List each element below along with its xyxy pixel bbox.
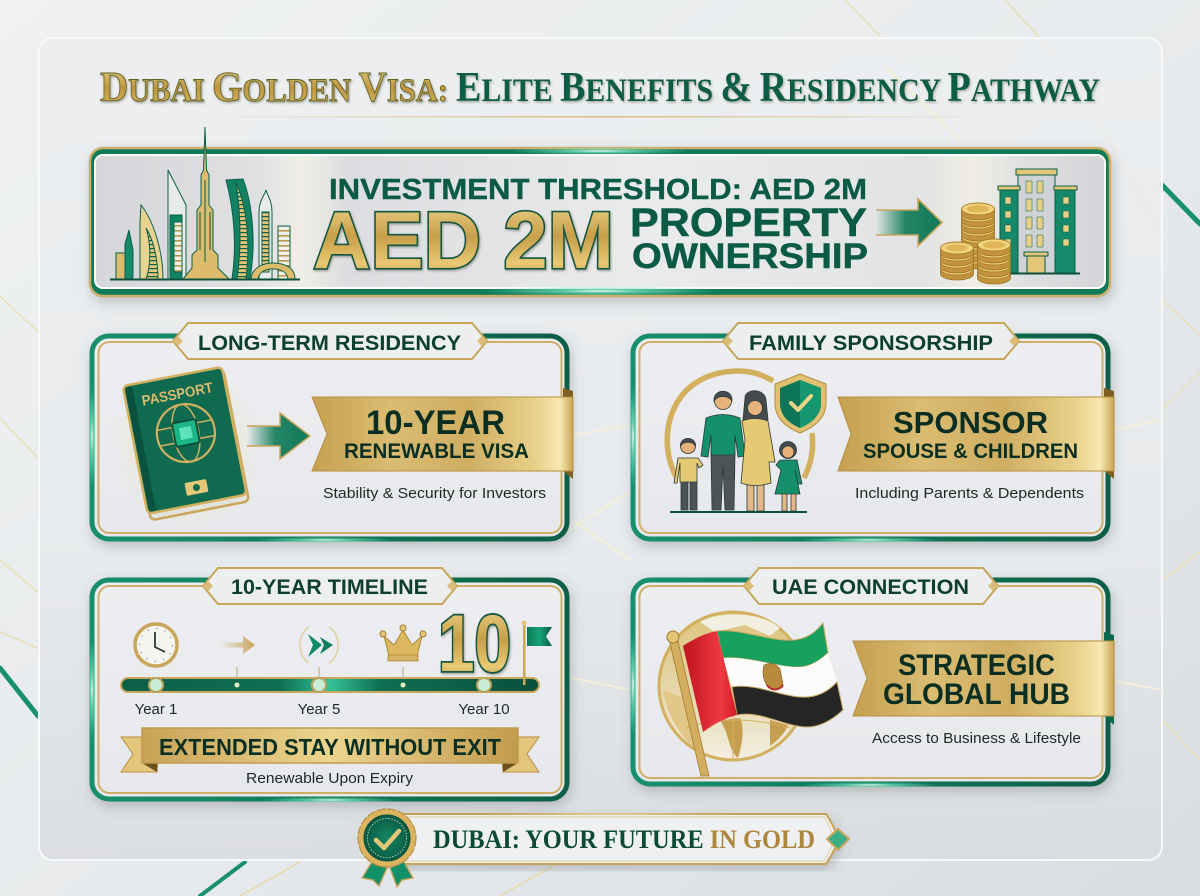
icon: passport: PASSPORT (141, 380, 214, 410)
icon: gold coins (940, 203, 1010, 284)
title: DUBAI GOLDEN VISA: (100, 65, 448, 111)
footer text: DUBAI: YOUR FUTURE IN GOLD (433, 825, 815, 854)
ribbon: GLOBAL HUB (883, 678, 1070, 711)
timeline labels: Year 1 (135, 701, 177, 718)
icon: fast-forward chevrons (300, 627, 338, 663)
ticks (237, 667, 403, 677)
icon: family in gold ring (667, 371, 813, 512)
icon: flag pole (667, 631, 709, 776)
ribbon banner (121, 728, 539, 772)
timeline labels (135, 701, 510, 718)
icon: building (998, 169, 1077, 273)
ribbon (312, 388, 573, 479)
panel: 10-year timeline (88, 568, 567, 803)
icon: Dubai skyline (116, 127, 295, 279)
hero text: investment threshold: INVESTMENT THRESHOLD: AED 2M (329, 174, 867, 206)
ribbon: 10-YEAR (366, 404, 505, 442)
icon: shield with check (775, 374, 826, 433)
caption: Renewable Upon Expiry (246, 770, 414, 787)
panel: family sponsorship (629, 323, 1114, 543)
title (100, 65, 1100, 111)
timeline track (121, 678, 539, 692)
ribbon: STRATEGIC (898, 649, 1055, 682)
heading plaque: 10-YEAR TIMELINE (231, 576, 428, 599)
big number 10: 10 (438, 599, 511, 689)
panel: UAE connection (629, 568, 1114, 788)
ribbon (838, 388, 1114, 479)
ribbon: SPOUSE & CHILDREN (863, 440, 1078, 463)
caption: Stability & Security for Investors (323, 485, 546, 502)
panel: long-term residency (88, 323, 573, 543)
heading plaque: LONG-TERM RESIDENCY (198, 332, 461, 355)
footer banner (358, 809, 849, 887)
icon: clock (135, 624, 177, 666)
heading plaque: FAMILY SPONSORSHIP (749, 332, 993, 355)
hero text: property ownership: PROPERTY (630, 201, 867, 245)
timeline labels: Year 10 (458, 701, 510, 718)
icon: UAE flag (683, 623, 843, 732)
heading plaque (203, 568, 457, 604)
panel streaks (570, 66, 1162, 690)
icon: check badge (358, 809, 416, 887)
icon: crown (380, 625, 426, 661)
icon: globe (659, 612, 807, 760)
ribbon banner: EXTENDED STAY WITHOUT EXIT (159, 734, 502, 760)
icon: green flag (522, 620, 552, 685)
title: ELITE BENEFITS & RESIDENCY PATHWAY (456, 65, 1100, 111)
arrow (876, 199, 942, 246)
heading plaque: UAE CONNECTION (772, 576, 969, 599)
hero text: property ownership (630, 201, 868, 276)
panel: investment threshold (90, 127, 1110, 296)
ribbon (853, 632, 1114, 725)
arrow (247, 413, 310, 459)
title underline (200, 116, 1008, 118)
ribbon: RENEWABLE VISA (344, 440, 529, 463)
caption: Access to Business & Lifestyle (872, 730, 1081, 747)
heading plaque (744, 568, 998, 604)
timeline labels: Year 5 (298, 701, 340, 718)
arrow: gold (220, 636, 255, 654)
diamond (827, 829, 849, 850)
heading plaque (723, 323, 1019, 359)
heading plaque (173, 323, 487, 359)
ribbon: SPONSOR (893, 405, 1048, 440)
hero text: property ownership: OWNERSHIP (632, 237, 868, 276)
icon: passport (100, 348, 274, 540)
hero text: AED 2M: AED 2M (313, 196, 614, 286)
caption: Including Parents & Dependents (855, 485, 1084, 502)
